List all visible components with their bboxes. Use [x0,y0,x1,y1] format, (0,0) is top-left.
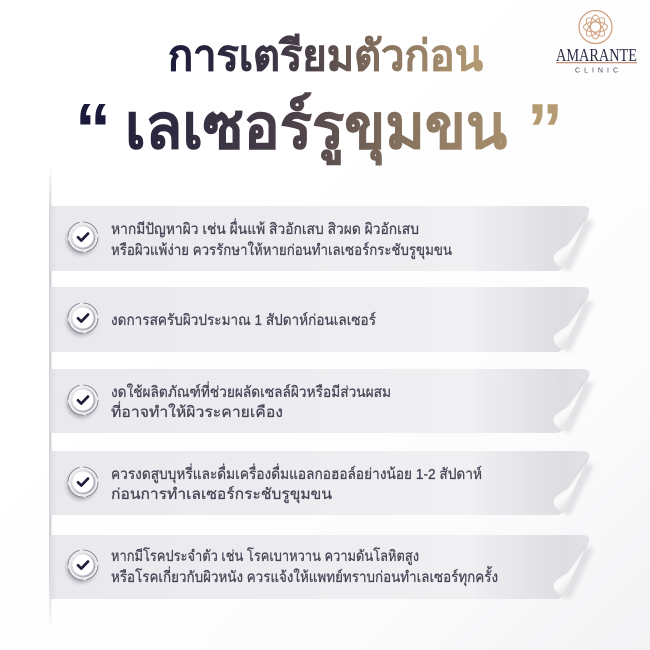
opening quote: “ [75,90,111,170]
item 4 check icon [67,467,98,500]
item 2 band [50,287,589,352]
logo underline [556,62,637,63]
item 3 text: งดใช้ผลิตภัณฑ์ที่ช่วยผลัดเซลล์ผิวหรือมีส่วนผสม [111,381,391,401]
logo subtitle: CLINIC [575,68,618,74]
item 1 band [50,206,589,271]
title line 1: การเตรียมตัวก่อน [168,32,483,79]
item 5 text: หากมีโรคประจำตัว เช่น โรคเบาหวาน ความดันโลหิตสูง [111,547,419,565]
item 1 [50,206,594,271]
item 5 check icon [67,550,98,582]
logo emblem [579,10,612,44]
item 4 band [50,451,589,515]
logo: Amarante Clinic [556,10,637,74]
title line 2 [75,90,563,170]
closing quote: ” [527,90,563,170]
item 5 page curl [553,543,594,599]
item 1 text: หากมีปัญหาผิว เช่น ผื่นแพ้ สิวอักเสบ สิวผด ผิวอักเสบ [111,218,419,238]
item 4 text: ควรงดสูบบุหรี่และดื่มเครื่องดื่มแอลกอฮอล์อย่างน้อย 1-2 สัปดาห์ [111,463,482,484]
item 5 band [50,535,589,599]
item 1 check icon [67,222,98,254]
item 4 [50,451,594,515]
item 3 check icon [67,385,98,418]
item 1 page curl [553,215,594,271]
item 3: ที่อาจทำให้ผิวระคายเคือง [111,401,283,421]
item 3 page curl [553,377,594,433]
item 2 page curl [553,296,594,352]
item 2 [50,287,594,352]
left edge line [49,165,52,630]
item 2 check icon [67,303,98,336]
item 5: หรือโรคเกี่ยวกับผิวหนัง ควรแจ้งให้แพทย์ทราบก่อนทำเลเซอร์ทุกครั้ง [111,566,498,587]
item 3 band [50,369,589,433]
item 5 [50,535,594,599]
item 1: หรือผิวแพ้ง่าย ควรรักษาให้หายก่อนทำเลเซอร์กระชับรูขุมขน [111,241,452,260]
title main text: เลเซอร์รูขุมขน [125,92,507,165]
item 4: ก่อนการทำเลเซอร์กระชับรูขุมขน [111,486,332,504]
item 4 page curl [553,459,594,515]
item 3 [50,369,594,433]
item 2 text: งดการสครับผิวประมาณ 1 สัปดาห์ก่อนเลเซอร์ [111,312,376,329]
